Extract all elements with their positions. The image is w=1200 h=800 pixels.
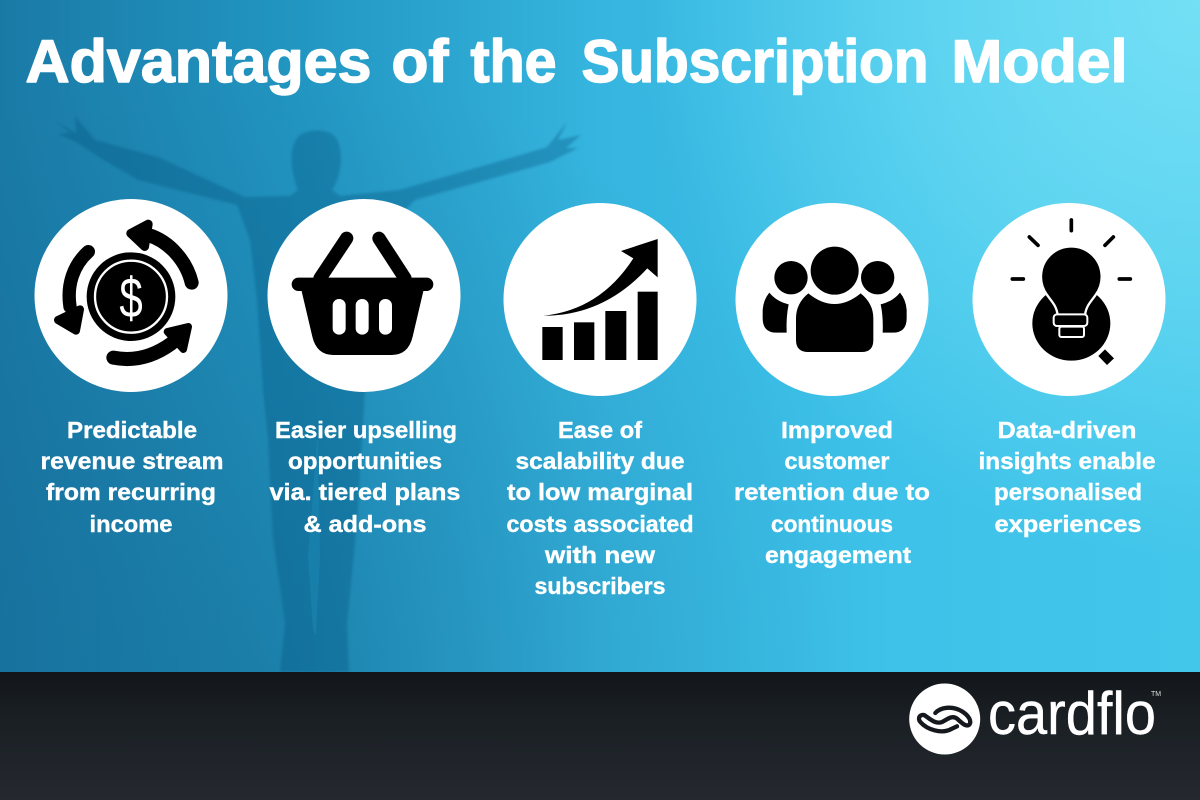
caption: Improved: [781, 417, 893, 443]
caption: Ease of: [558, 417, 642, 443]
panel: predictable revenue: [34, 199, 228, 537]
caption: continuous: [771, 511, 893, 537]
title: the: [470, 28, 556, 95]
caption: to low marginal: [507, 479, 693, 505]
title: Subscription: [582, 28, 928, 95]
caption: insights enable: [978, 448, 1156, 474]
caption: [270, 417, 460, 537]
logo mark: [909, 684, 980, 754]
icon: shopping basket: [268, 199, 460, 392]
icon: recurring revenue dollar coin: [34, 199, 228, 392]
caption: [734, 417, 930, 568]
caption: costs associated: [506, 511, 694, 537]
title: Advantages: [26, 28, 372, 95]
silhouette leg gap: [308, 440, 320, 635]
caption: from recurring: [46, 479, 216, 505]
title: of: [392, 28, 450, 95]
caption: [506, 417, 694, 599]
caption: via. tiered plans: [270, 479, 460, 505]
icon: group of people: [736, 203, 928, 396]
panel: customer retention: [734, 203, 930, 568]
silhouette of person with raised arms: [55, 116, 581, 672]
trademark: TM: [1151, 691, 1161, 698]
caption: [978, 417, 1156, 537]
caption: revenue stream: [40, 448, 224, 474]
icon: light bulb with magnifier: [972, 203, 1166, 396]
caption: customer: [784, 448, 890, 474]
caption: income: [90, 511, 172, 537]
caption: Data-driven: [998, 417, 1136, 443]
panel: easier upselling: [268, 199, 460, 537]
caption: retention due to: [734, 479, 930, 505]
title: [26, 28, 1128, 95]
title: Model: [952, 28, 1128, 95]
caption: scalability due: [516, 448, 684, 474]
caption: Easier upselling: [275, 417, 457, 443]
caption: & add-ons: [304, 511, 426, 537]
caption: experiences: [994, 511, 1142, 537]
caption: subscribers: [534, 573, 666, 599]
logo wordmark: cardflo: [988, 680, 1156, 747]
logo: cardflo: [909, 680, 1161, 754]
icon: growth bar chart with arrow: [504, 203, 696, 396]
caption: [40, 417, 224, 537]
caption: Predictable: [67, 417, 197, 443]
icon: recurring revenue dollar coin: $: [119, 267, 143, 330]
panel: scalability: [504, 203, 696, 599]
footer band: [0, 672, 1200, 800]
caption: with new: [544, 542, 655, 568]
caption: opportunities: [288, 448, 442, 474]
caption: personalised: [994, 479, 1142, 505]
panel: data-driven insights: [972, 203, 1166, 537]
caption: engagement: [765, 542, 911, 568]
